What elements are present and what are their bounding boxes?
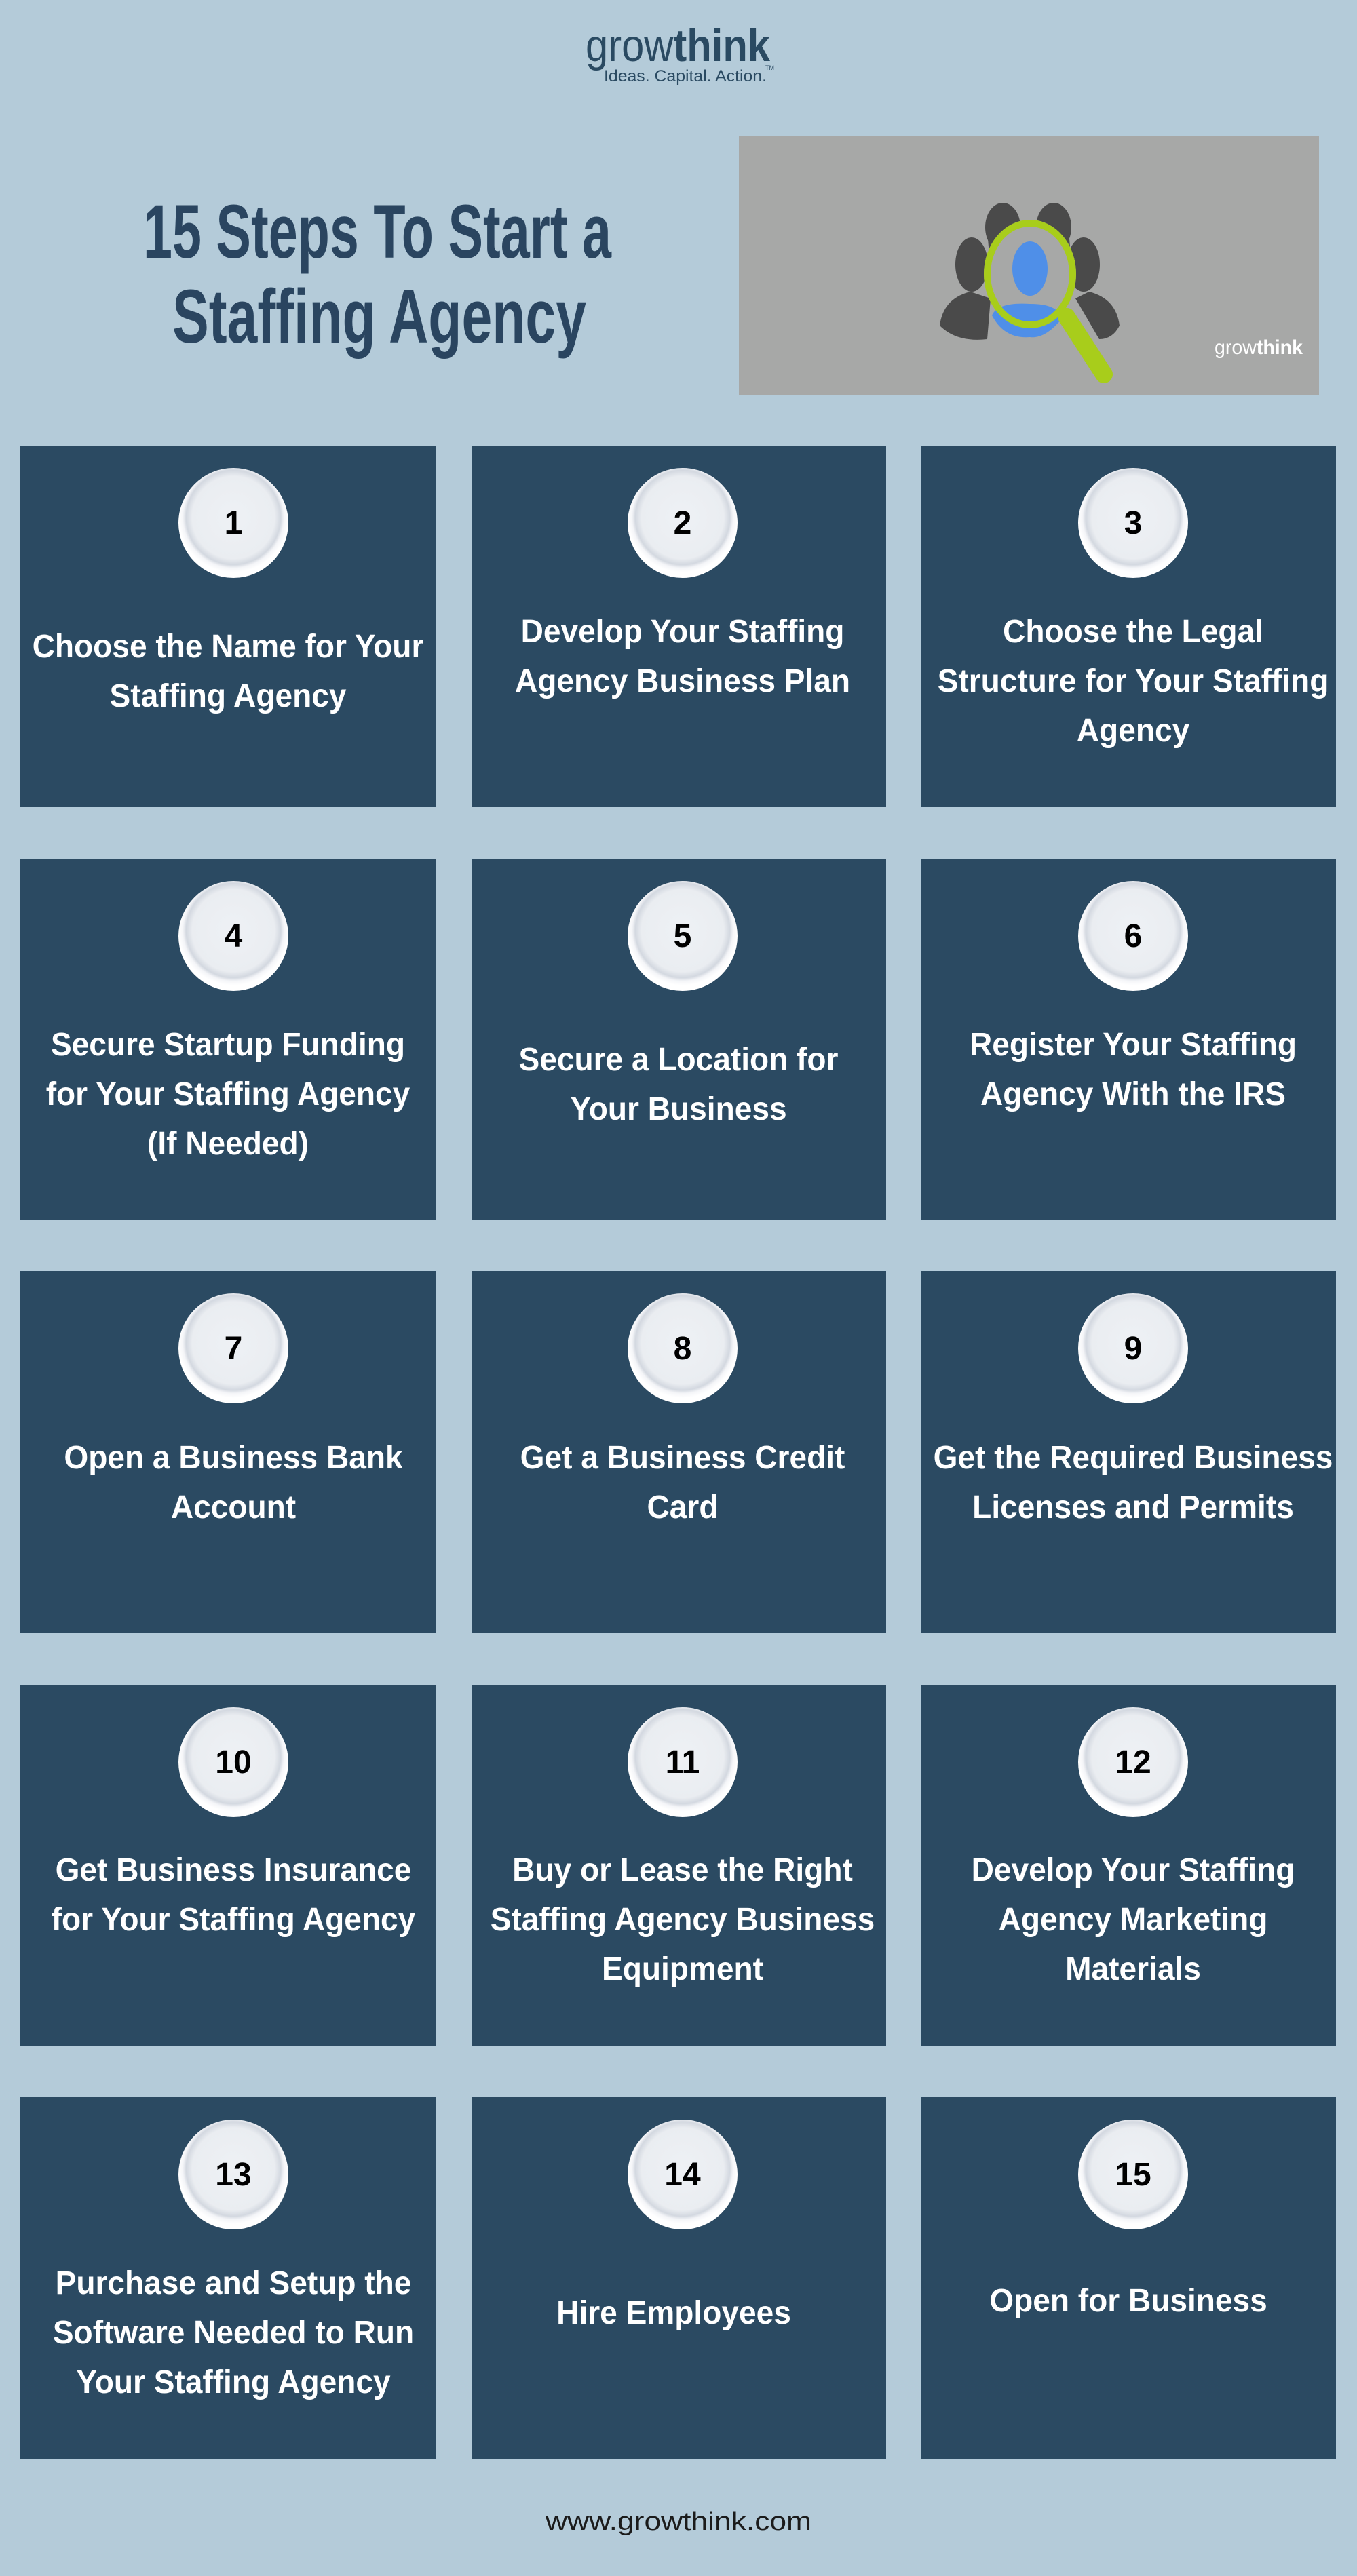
card 3	[921, 446, 1336, 807]
card 5	[472, 859, 886, 1220]
card 4: 4	[225, 918, 243, 954]
card 1: Staffing Agency	[110, 677, 346, 714]
card 2: Develop Your Staffing	[521, 612, 844, 649]
card 8	[472, 1271, 886, 1633]
card 7: Open a Business Bank	[64, 1439, 403, 1475]
card 9	[921, 1271, 1336, 1633]
card 3: Structure for Your Staffing	[938, 662, 1329, 699]
icon: people search	[940, 203, 1120, 374]
footer url: www.growthink.com	[545, 2507, 811, 2536]
card 4: for Your Staffing Agency	[46, 1075, 410, 1112]
card 13: Purchase and Setup the	[56, 2264, 411, 2301]
title: Staffing Agency	[172, 274, 586, 359]
card 8: Card	[647, 1488, 718, 1525]
card 4: Secure Startup Funding	[51, 1026, 405, 1062]
card 4: (If Needed)	[147, 1125, 309, 1161]
card 12: Agency Marketing	[999, 1900, 1267, 1937]
card 11: Equipment	[602, 1950, 763, 1987]
card 15: Open for Business	[989, 2282, 1267, 2318]
card 6: Agency With the IRS	[980, 1075, 1286, 1112]
card 15: 15	[1115, 2157, 1151, 2193]
card 7: 7	[225, 1331, 242, 1367]
card 11: Staffing Agency Business	[491, 1900, 875, 1937]
card 8: Get a Business Credit	[520, 1439, 845, 1475]
card 10: Get Business Insurance	[56, 1851, 411, 1888]
card 9: Licenses and Permits	[972, 1488, 1294, 1525]
card 2	[472, 446, 886, 807]
card 14	[472, 2097, 886, 2459]
card 12: 12	[1115, 1744, 1151, 1780]
card 9: 9	[1124, 1331, 1142, 1367]
card 5: Your Business	[570, 1090, 787, 1127]
card 6: Register Your Staffing	[970, 1026, 1297, 1062]
card 13: 13	[215, 2157, 252, 2193]
card 3: Choose the Legal	[1003, 612, 1263, 649]
title: 15 Steps To Start a	[143, 189, 611, 274]
card 13: Your Staffing Agency	[76, 2363, 391, 2400]
card 5: 5	[674, 918, 691, 954]
card 2: 2	[674, 505, 691, 541]
card 10: for Your Staffing Agency	[52, 1900, 415, 1937]
card 3: 3	[1124, 505, 1142, 541]
card 2: Agency Business Plan	[515, 662, 850, 699]
card 9: Get the Required Business	[934, 1439, 1333, 1475]
card 7	[20, 1271, 436, 1633]
card 6: 6	[1124, 918, 1142, 954]
card 1: Choose the Name for Your	[33, 627, 423, 664]
card 14: Hire Employees	[556, 2294, 791, 2330]
card 11: 11	[666, 1744, 700, 1780]
logo: growthink	[586, 20, 771, 71]
logo: Ideas. Capital. Action.	[604, 67, 767, 85]
watermark: growthink	[1215, 336, 1303, 359]
card 1: 1	[225, 505, 242, 541]
card 11: Buy or Lease the Right	[512, 1851, 853, 1888]
card 1	[20, 446, 436, 807]
card 14: 14	[664, 2157, 701, 2193]
card 3: Agency	[1077, 711, 1189, 748]
card 10	[20, 1685, 436, 2046]
hero image: magnifier over people	[739, 136, 1319, 395]
card 12: Develop Your Staffing	[972, 1851, 1295, 1888]
card 8: 8	[674, 1331, 691, 1367]
card 5: Secure a Location for	[519, 1040, 838, 1077]
card 13	[20, 2097, 436, 2459]
card 12	[921, 1685, 1336, 2046]
card 11	[472, 1685, 886, 2046]
card 10: 10	[215, 1744, 252, 1780]
title	[143, 189, 611, 359]
card 13: Software Needed to Run	[53, 2314, 414, 2350]
logo: TM	[765, 64, 774, 71]
card 15	[921, 2097, 1336, 2459]
card 4	[20, 859, 436, 1220]
card 6	[921, 859, 1336, 1220]
card 12: Materials	[1065, 1950, 1201, 1987]
card 7: Account	[171, 1488, 296, 1525]
